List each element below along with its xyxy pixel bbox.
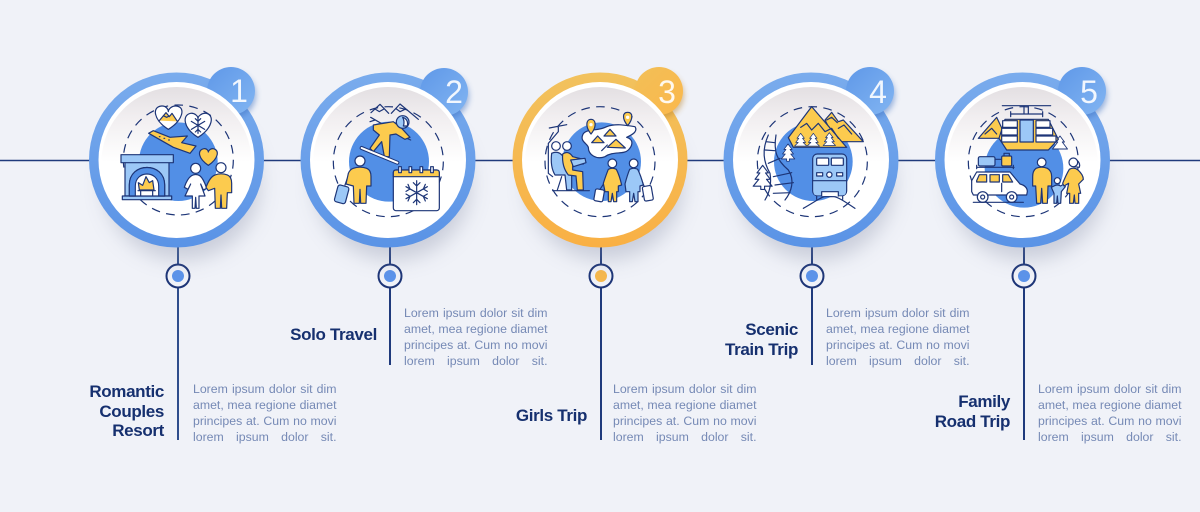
text block: step 2 description: Lorem ipsum dolor sit dim <box>404 306 548 320</box>
heading: Family Road Trip <box>935 392 1010 430</box>
step 4 connector and marker <box>800 240 824 365</box>
text block: step 3 description: lorem ipsum dolor sit. <box>613 430 756 444</box>
heading: Family Road Trip: Road Trip <box>935 412 1010 430</box>
text block: step 4 description: Lorem ipsum dolor sit dim <box>826 306 970 320</box>
text block: step 4 description: principes at. Cum no movi <box>826 338 970 352</box>
step 3 connector and marker <box>590 240 612 440</box>
badge number 2: 2 <box>445 74 463 110</box>
badge number 5: 5 <box>1080 74 1098 110</box>
step 5 connector and marker <box>1012 240 1036 440</box>
heading: Scenic Train Trip: Train Trip <box>725 340 798 358</box>
panel: step 5 circle <box>935 67 1110 260</box>
heading: Solo Travel: Solo Travel <box>290 325 377 344</box>
icon: romantic couples resort <box>121 105 233 215</box>
badge number 4: 4 <box>869 74 887 110</box>
badge number 1: 1 <box>230 73 248 109</box>
text block: step 1 description: lorem ipsum dolor sit. <box>193 430 336 444</box>
icon: girls trip with chairlift and map <box>545 107 655 217</box>
text block: step 4 description: amet, mea regione diamet <box>826 322 970 336</box>
text block: step 1 description: amet, mea regione diamet <box>193 398 336 412</box>
text block: step 1 description: principes at. Cum no movi <box>193 414 336 428</box>
icon: solo skier with calendar <box>333 104 443 217</box>
text block: step 5 description <box>1038 382 1182 444</box>
heading: Scenic Train Trip: Scenic <box>745 320 798 339</box>
text block: step 5 description: amet, mea regione diamet <box>1038 398 1182 412</box>
text block: step 5 description: principes at. Cum no movi <box>1038 414 1182 428</box>
panel: step 2 circle <box>300 68 476 260</box>
text block: step 2 description: lorem ipsum dolor sit. <box>404 354 548 368</box>
heading: Family Road Trip: Family <box>958 392 1010 411</box>
text block: step 3 description: principes at. Cum no movi <box>613 414 756 428</box>
text block: step 3 description: Lorem ipsum dolor sit dim <box>613 382 756 396</box>
panel: step 3 circle <box>512 67 688 260</box>
step 2 connector and marker <box>378 240 402 365</box>
text block: step 2 description: amet, mea regione diamet <box>404 322 548 336</box>
heading: Scenic Train Trip <box>725 320 798 358</box>
text block: step 5 description: lorem ipsum dolor sit. <box>1038 430 1182 444</box>
text block: step 1 description: Lorem ipsum dolor sit dim <box>193 382 336 396</box>
heading: Romantic Couples Resort: Couples <box>99 402 164 420</box>
text block: step 2 description <box>404 306 548 368</box>
panel: step 1 circle <box>89 67 264 260</box>
text block: step 3 description: amet, mea regione diamet <box>613 398 756 412</box>
badge number 3: 3 <box>658 74 676 110</box>
panel: step 4 circle <box>724 67 898 260</box>
text block: step 2 description: principes at. Cum no movi <box>404 338 548 352</box>
heading: Romantic Couples Resort: Romantic <box>89 382 164 401</box>
icon: family road trip with cable car <box>968 106 1083 217</box>
text block: step 4 description: lorem ipsum dolor sit. <box>826 354 970 368</box>
horizontal timeline line <box>0 160 1200 162</box>
step 1 connector and marker <box>166 240 190 440</box>
heading: Romantic Couples Resort: Resort <box>112 421 164 440</box>
text block: step 3 description <box>613 382 756 444</box>
heading: Girls Trip: Girls Trip <box>516 406 587 425</box>
text block: step 4 description <box>826 306 970 368</box>
icon: scenic train trip <box>753 107 867 217</box>
heading: Romantic Couples Resort <box>89 382 164 440</box>
text block: step 1 description <box>193 382 336 444</box>
text block: step 5 description: Lorem ipsum dolor sit dim <box>1038 382 1182 396</box>
